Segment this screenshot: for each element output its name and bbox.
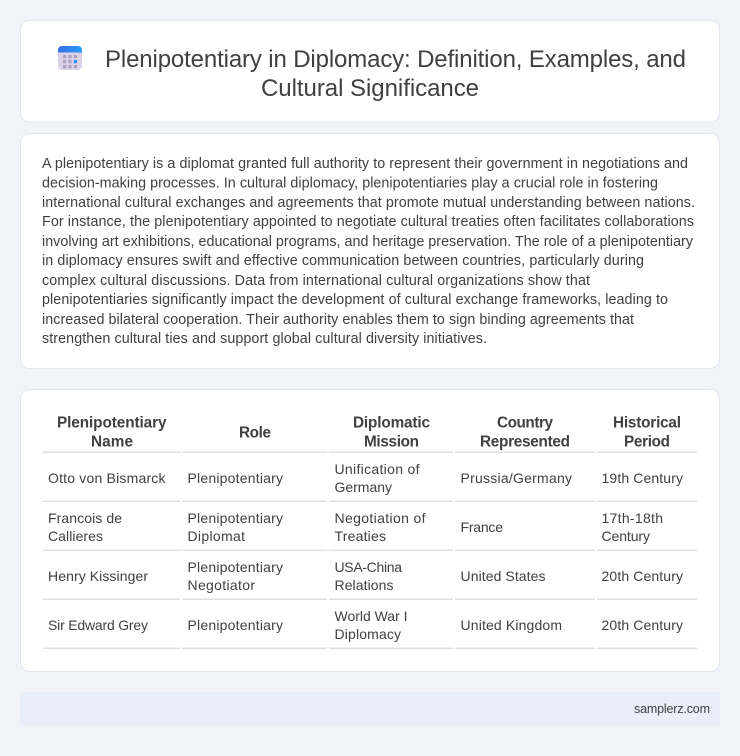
title: Cultural Significance <box>261 75 479 102</box>
table row: Francois de Callieres: Diplomat <box>188 528 245 544</box>
table row: Henry Kissinger: Plenipotentiary <box>188 559 283 575</box>
table row: Otto von Bismarck: Plenipotentiary <box>188 470 283 486</box>
title: Plenipotentiary in Diplomacy: Definition, Examples, and <box>105 46 686 73</box>
table row: Henry Kissinger: Relations <box>334 577 394 593</box>
table row: Sir Edward Grey: Diplomacy <box>334 626 401 642</box>
table row: Otto von Bismarck: 19th Century <box>602 470 683 486</box>
text block: description <box>42 156 695 347</box>
table row: Francois de Callieres: Callieres <box>48 528 103 544</box>
table row: Sir Edward Grey: Plenipotentiary <box>188 617 283 633</box>
table rules <box>43 452 697 649</box>
table row: Henry Kissinger <box>48 559 683 593</box>
table row: Otto von Bismarck: Prussia/Germany <box>460 470 572 486</box>
footer source text: samplerz.com <box>634 702 710 716</box>
text block: description: increased bilateral cooperation. Their authority enables them to sign binding agreements that <box>42 312 634 328</box>
table row: Sir Edward Grey <box>48 608 683 642</box>
table row: Henry Kissinger: Henry Kissinger <box>48 568 148 584</box>
table row: Henry Kissinger: Negotiator <box>188 577 255 593</box>
text block: description: complex cultural discussions. Data from international cultural organizations show that <box>42 273 590 289</box>
table row: Francois de Callieres: 17th-18th <box>602 510 663 526</box>
text block: description: strengthen cultural ties and support global cultural diversity initiatives. <box>42 331 487 347</box>
table row: Sir Edward Grey: World War I <box>334 608 408 624</box>
table header: Period <box>624 434 670 451</box>
table row: Henry Kissinger: 20th Century <box>602 568 683 584</box>
text block: description: involving art exhibitions, educational programs, and heritage preservation. The role of a plenipotentiary <box>42 234 694 250</box>
table header: Plenipotentiary <box>57 415 167 432</box>
panel: title card <box>20 20 720 122</box>
table row: Francois de Callieres: Plenipotentiary <box>188 510 283 526</box>
text block: description: international cultural exchanges and agreements that promote mutual understanding between nations. <box>42 195 695 211</box>
table header: Role <box>239 425 271 442</box>
text block: description: A plenipotentiary is a diplomat granted full authority to represent their government in negotiations and <box>42 156 688 172</box>
table header: Name <box>91 434 133 451</box>
table row: Francois de Callieres: Francois de <box>48 510 122 526</box>
text block: description: decision-making processes. In cultural diplomacy, plenipotentiaries play a crucial role in fostering <box>42 175 658 191</box>
table row: Otto von Bismarck: Unification of <box>334 461 420 477</box>
table row: Sir Edward Grey: United Kingdom <box>460 617 562 633</box>
table header: Represented <box>480 434 570 451</box>
table row: Otto von Bismarck <box>48 461 683 495</box>
table row: Otto von Bismarck: Otto von Bismarck <box>48 470 166 486</box>
table row: Francois de Callieres <box>48 510 663 544</box>
icon: calendar <box>58 46 82 70</box>
table row: Henry Kissinger: USA-China <box>334 559 402 575</box>
table row: Henry Kissinger: United States <box>460 568 546 584</box>
panel: table card <box>20 390 720 672</box>
table header: Diplomatic <box>353 415 430 432</box>
table header: Historical <box>613 415 681 432</box>
footer bar <box>20 692 720 726</box>
table row: Sir Edward Grey: Sir Edward Grey <box>48 617 148 633</box>
table row: Otto von Bismarck: Germany <box>334 479 392 495</box>
text block: description: in diplomacy ensures swift and effective communication between countries, particularly during <box>42 253 644 269</box>
table row: Francois de Callieres: Negotiation of <box>334 510 426 526</box>
title <box>105 46 686 102</box>
text block: description: For instance, the plenipotentiary appointed to negotiate cultural treaties often facilitates collaborations <box>42 214 694 230</box>
table row: Francois de Callieres: France <box>460 519 503 535</box>
table row: Sir Edward Grey: 20th Century <box>602 617 683 633</box>
panel: description card <box>20 134 720 368</box>
table header: Mission <box>364 434 419 451</box>
table header: Country <box>497 415 553 432</box>
table row: Francois de Callieres: Century <box>602 528 650 544</box>
text block: description: plenipotentiaries significantly impact the development of cultural exchange frameworks, leading to <box>42 292 668 308</box>
table header <box>57 415 681 451</box>
table row: Francois de Callieres: Treaties <box>334 528 386 544</box>
